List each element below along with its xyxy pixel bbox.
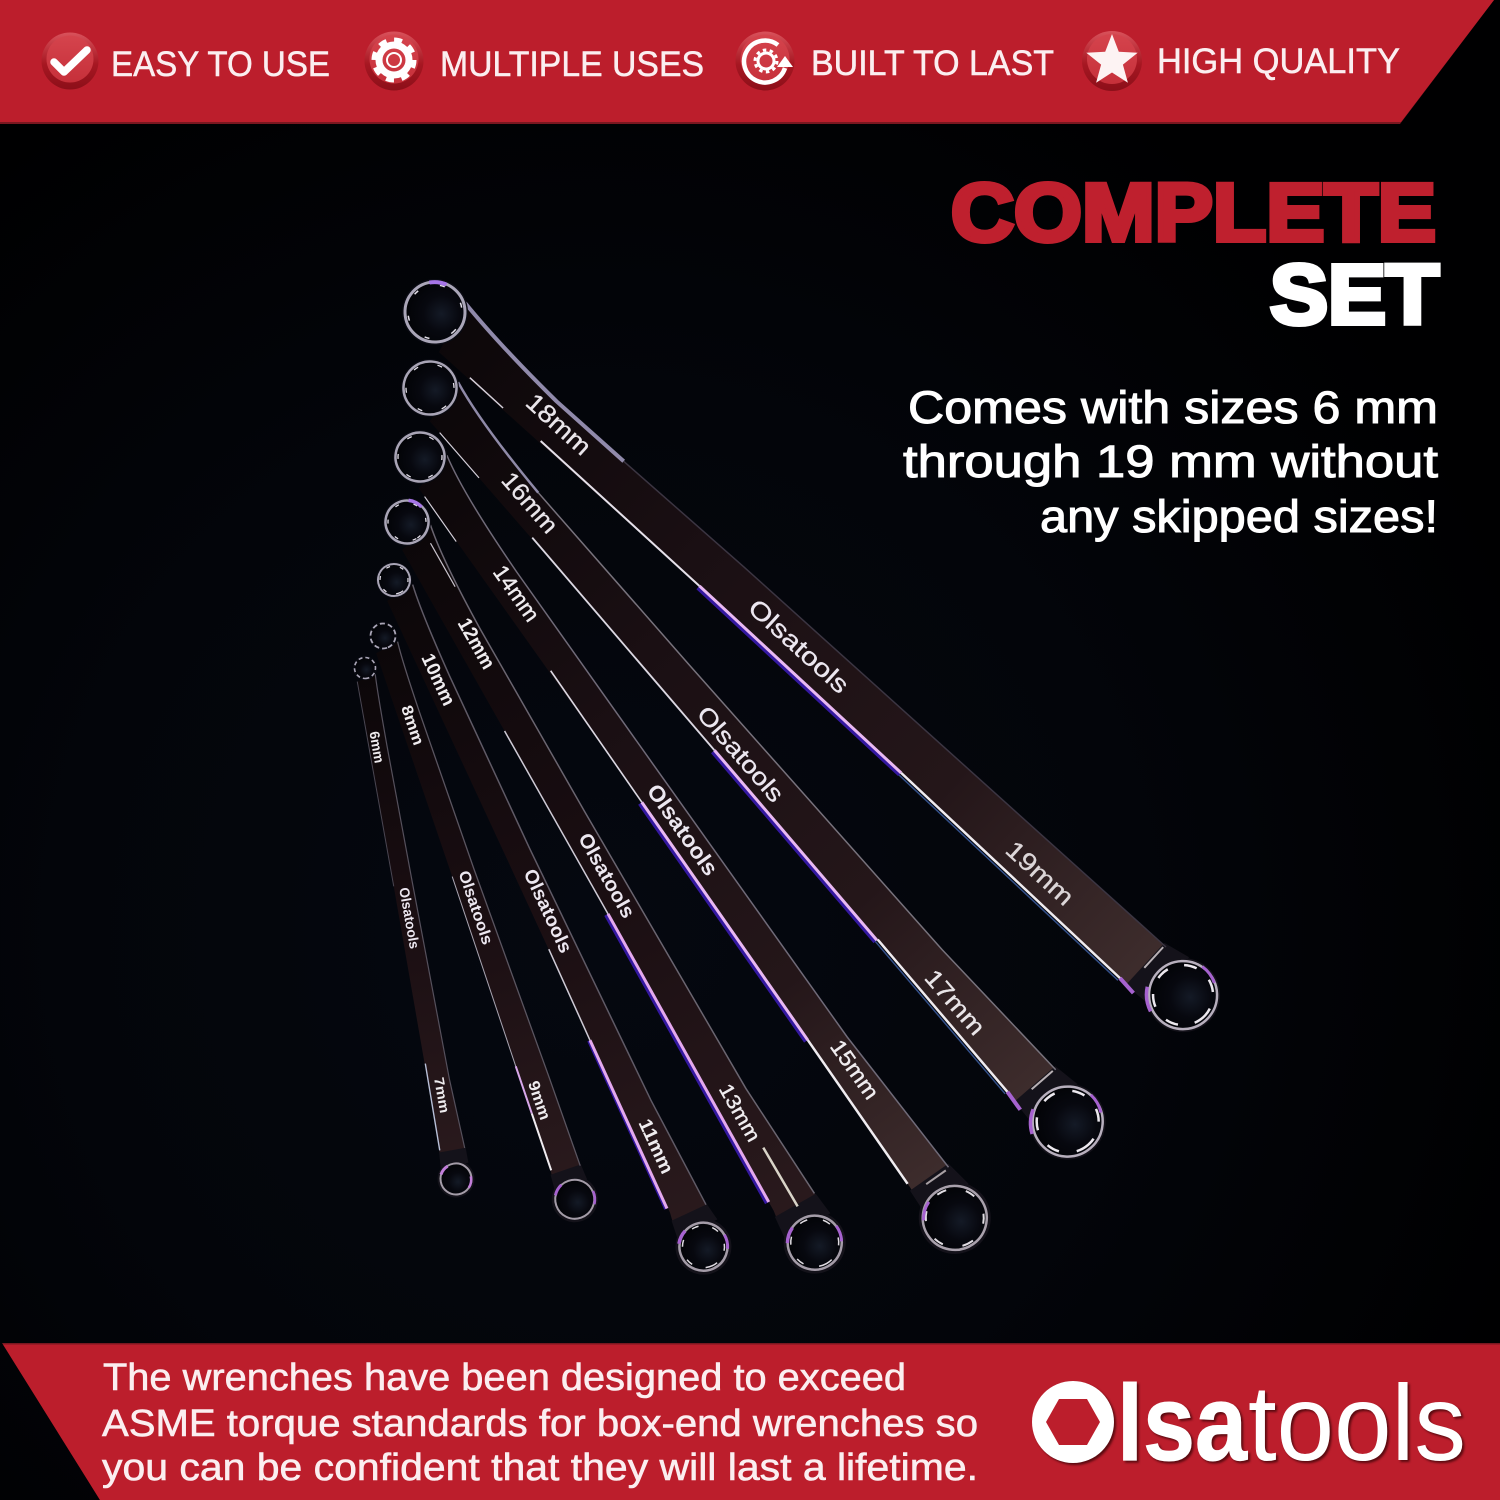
wrench: 8mm / 9mm: 8mm <box>397 703 427 748</box>
logo: Olsatools: tools <box>1248 1362 1466 1483</box>
logo: Olsatools <box>1032 1362 1466 1485</box>
footer text <box>102 1357 978 1489</box>
wrench: 10mm / 11mm <box>361 552 741 1284</box>
wrench: 10mm / 11mm: Olsatools <box>519 866 576 957</box>
title: complete set: SET <box>1270 248 1439 342</box>
wrench: 16mm / 17mm: Olsatools <box>691 701 789 808</box>
wrench: 12mm / 13mm: Olsatools <box>573 830 639 922</box>
wrench: 6mm / 7mm: 6mm <box>366 730 388 764</box>
badge: easy to use <box>42 32 98 90</box>
wrench: 12mm / 13mm: 13mm <box>714 1080 764 1146</box>
wrench: 16mm / 17mm: 16mm <box>496 467 563 539</box>
description text: Comes with sizes 6 mm <box>908 382 1438 433</box>
wrench: 12mm / 13mm <box>368 486 857 1285</box>
wrench: 16mm / 17mm <box>382 341 1121 1175</box>
label: easy to use: EASY TO USE <box>111 45 330 84</box>
logo: Olsatools: O <box>1033 1362 1113 1485</box>
badge: built to last <box>736 32 794 90</box>
header banner <box>0 0 1494 124</box>
badge: multiple uses <box>364 32 424 90</box>
wrench: 18mm / 19mm <box>386 262 1235 1047</box>
label: high quality: HIGH QUALITY <box>1157 42 1400 81</box>
wrench: 12mm / 13mm: 12mm <box>453 614 499 673</box>
wrench: 18mm / 19mm: 19mm <box>1000 835 1079 911</box>
description text <box>903 382 1439 542</box>
badge: high quality <box>1082 31 1142 91</box>
wrench: 14mm / 15mm: 15mm <box>825 1035 884 1104</box>
footer text: you can be confident that they will last a lifetime. <box>102 1447 978 1489</box>
footer banner <box>2 1343 1500 1500</box>
wrench: 10mm / 11mm: 10mm <box>417 651 459 709</box>
label: multiple uses: MULTIPLE USES <box>440 45 704 84</box>
description text: through 19 mm without <box>903 436 1439 487</box>
wrench: 10mm / 11mm: 11mm <box>634 1116 677 1177</box>
title: complete set: COMPLETE <box>951 168 1436 258</box>
wrench: 14mm / 15mm: Olsatools <box>642 779 723 880</box>
logo: Olsatools: lsa <box>1117 1362 1248 1483</box>
description text: any skipped sizes! <box>1040 491 1438 542</box>
wrench: 14mm / 15mm <box>375 414 1005 1268</box>
wrench: 18mm / 19mm: 18mm <box>520 388 597 461</box>
label: built to last: BUILT TO LAST <box>811 44 1054 83</box>
title: complete set <box>951 168 1439 342</box>
wrench: 18mm / 19mm: Olsatools <box>742 594 854 699</box>
wrench: 14mm / 15mm: 14mm <box>488 560 545 626</box>
wrench: 6mm / 7mm: 7mm <box>431 1076 453 1114</box>
footer text: ASME torque standards for box-end wrenches so <box>102 1403 978 1445</box>
wrench: 8mm / 9mm <box>357 615 604 1228</box>
footer text: The wrenches have been designed to exceed <box>103 1357 906 1399</box>
wrench: 8mm / 9mm: Olsatools <box>455 869 496 947</box>
wrench: 8mm / 9mm: 9mm <box>524 1079 553 1122</box>
wrench: 6mm / 7mm: Olsatools <box>396 886 423 950</box>
wrench: 6mm / 7mm <box>345 653 477 1200</box>
wrench: 16mm / 17mm: 17mm <box>919 964 990 1041</box>
